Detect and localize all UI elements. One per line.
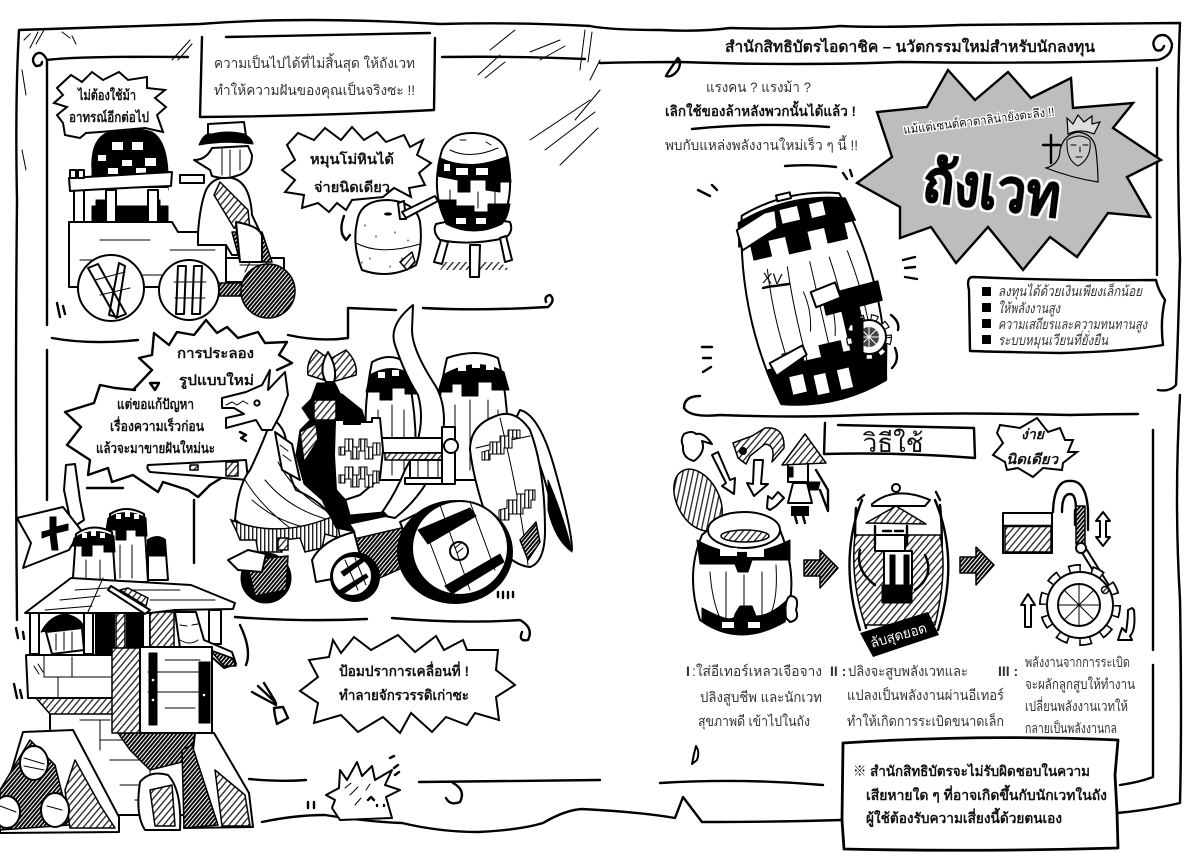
rear barrels bbox=[365, 353, 509, 480]
step I text: ปลิงสูบชีพ และนักเวท bbox=[700, 689, 822, 706]
step II text: II : bbox=[830, 663, 846, 679]
illustration: rider on barrel cart bbox=[57, 122, 295, 321]
feature list box: ให้พลังงานสูง bbox=[998, 300, 1061, 317]
millstone bbox=[341, 196, 438, 274]
step III text: กลายเป็นพลังงานกล bbox=[1025, 719, 1117, 736]
stool bbox=[434, 219, 512, 277]
title banner: สำนักสิทธิบัตรไอดาชิค – นวัตกรรมใหม่สำหรับนักลงทุน bbox=[725, 37, 1095, 57]
step II text: ปลิงจะสูบพลังเวทและ bbox=[848, 663, 968, 680]
track right bbox=[138, 733, 253, 830]
step III text: เปลี่ยนพลังงานเวทให้ bbox=[1025, 697, 1128, 714]
track left bbox=[0, 730, 119, 833]
curved horn tail bbox=[380, 305, 444, 518]
rider bbox=[180, 122, 272, 262]
caption: endless possibilities bbox=[200, 33, 435, 117]
illustration: millstone and barrel on stool bbox=[341, 133, 512, 277]
icon: leech bbox=[733, 428, 784, 464]
speech bubble: no horses needed: อาทรณ์อีกต่อไป bbox=[69, 108, 149, 125]
speech bubble: easy and cheap: นิดเดียว bbox=[1006, 451, 1059, 467]
label: top secret: ลับสุดยอด bbox=[868, 620, 929, 652]
arrows into barrel bbox=[712, 452, 784, 510]
step III text: พลังงานจากการระเบิด bbox=[1025, 654, 1130, 670]
speech bubble: millstone: จ่ายนิดเดียว bbox=[314, 179, 390, 195]
cart wheels bbox=[57, 255, 295, 321]
step I text: :ใส่อีเทอร์เหลวเจือจาง bbox=[692, 663, 822, 679]
heading: how to use: วิธีใช้ bbox=[862, 428, 923, 458]
illustration: dragon knight war machine bbox=[147, 305, 572, 604]
illustration: moving fortress tower bbox=[0, 464, 288, 833]
soldier with beard bbox=[175, 612, 236, 668]
speech bubble: new kind of contest: การประลอง bbox=[177, 345, 254, 361]
knight shield bbox=[334, 418, 383, 500]
speech bubble: no horses needed: ไม่ต้องใช้ม้า bbox=[76, 86, 136, 103]
speech bubble: moving fortress: ป้อมปราการเคลื่อนที่ ! bbox=[339, 661, 469, 679]
illustration: tilted magic barrel: XV bbox=[762, 270, 783, 288]
gray star burst: product name: แม้แต่เซนต์คาตาลิน่ายังตะลึง !! bbox=[903, 105, 1055, 137]
soldier with dark helmet bbox=[41, 614, 84, 654]
small wheel bbox=[330, 552, 380, 602]
feature list box: ระบบหมุนเวียนที่ยั่งยืน bbox=[998, 330, 1108, 349]
speech bubble: new kind of contest bbox=[133, 320, 292, 440]
disclaimer box: เสียหายใด ๆ ที่อาจเกิดขึ้นกับนักเวทในถัง bbox=[866, 784, 1107, 803]
intro text block: เลิกใช้ของล้าหลังพวกนั้นได้แล้ว ! bbox=[665, 100, 856, 119]
step I text bbox=[686, 663, 822, 730]
flag bbox=[17, 464, 84, 568]
arrow: step one to two bbox=[804, 550, 838, 588]
step III text bbox=[998, 654, 1135, 736]
wood panel with straps bbox=[112, 647, 212, 733]
gray star burst: product name: ถังเวท bbox=[919, 148, 1064, 230]
step I text: I bbox=[686, 663, 690, 679]
speech bubble: millstone bbox=[282, 127, 431, 212]
crossbar bbox=[380, 427, 458, 484]
speech bubble: easy and cheap bbox=[993, 418, 1077, 477]
step II text: แปลงเป็นพลังงานผ่านอีเทอร์ bbox=[847, 686, 1004, 703]
speech bubble: moving fortress bbox=[300, 635, 515, 733]
tower posts and windows bbox=[28, 610, 221, 657]
step III text: III : bbox=[998, 663, 1018, 679]
speech bubble: no horses needed bbox=[54, 72, 166, 138]
intro text block: แรงคน ? แรงม้า ? bbox=[706, 79, 811, 95]
step III text: จะผลักลูกสูบให้ทำงาน bbox=[1025, 676, 1135, 693]
feature list box: ลงทุนได้ด้วยเงินเพียงเล็กน้อย bbox=[998, 283, 1143, 300]
gear bbox=[1044, 569, 1116, 641]
barrel on cart bbox=[69, 128, 172, 222]
pipe bbox=[1053, 481, 1088, 530]
large shield bbox=[470, 410, 572, 567]
gray star burst: product name bbox=[857, 70, 1161, 270]
caption: endless possibilities: ทำให้ความฝันของคุณเป็นจริงซะ !! bbox=[214, 81, 415, 99]
disclaimer box: ※ สำนักสิทธิบัตรจะไม่รับผิดชอบในความ bbox=[853, 762, 1090, 779]
intro text block bbox=[665, 79, 858, 167]
motion marks bbox=[698, 170, 917, 372]
speech bubble: fix speed first bbox=[65, 385, 223, 497]
arrow: step two to three bbox=[960, 547, 994, 585]
speech bubble: easy and cheap: ง่าย bbox=[1021, 426, 1046, 442]
stool barrel bbox=[437, 133, 511, 231]
knight bbox=[296, 350, 388, 532]
step I text: สุขภาพดี เข้าไปในถัง bbox=[698, 713, 810, 730]
icon: hedgehog creature bbox=[308, 756, 400, 820]
dragon head bbox=[222, 370, 288, 441]
speech bubble: millstone: หมุนโม่หินได้ bbox=[310, 150, 394, 168]
feature list box: ความเสถียรและความทนทานสูง bbox=[998, 316, 1148, 333]
stone column bbox=[36, 698, 205, 815]
motion marks bbox=[14, 625, 288, 724]
queen portrait bbox=[1043, 115, 1100, 182]
icon: jug bbox=[682, 432, 712, 461]
tower barrels bbox=[72, 509, 168, 592]
wizard child bbox=[782, 434, 828, 523]
feature list box bbox=[968, 277, 1165, 353]
motion arrows bbox=[1096, 512, 1110, 546]
gear bbox=[850, 315, 898, 368]
illustration: tilted magic barrel bbox=[698, 170, 917, 415]
label: top secret bbox=[860, 612, 939, 657]
speech bubble: fix speed first: เรื่องความเร็วก่อน bbox=[110, 416, 204, 434]
icon: feather bbox=[692, 746, 698, 764]
piston rod bbox=[1076, 506, 1110, 592]
big wheel bbox=[397, 500, 513, 604]
cart body bbox=[69, 222, 285, 296]
speech bubble: fix speed first: แล้วจะมาขายฝันใหม่นะ bbox=[96, 439, 215, 456]
roof bbox=[25, 578, 235, 614]
speech bubble: fix speed first: แต่ขอแก้ปัญหา bbox=[117, 396, 194, 413]
step III illustration: piston and gear bbox=[1003, 481, 1134, 641]
main barrel bbox=[693, 512, 797, 635]
legs and armor plates bbox=[228, 510, 428, 603]
intro text block: พบกับแหล่งพลังงานใหม่เร็ว ๆ นี้ !! bbox=[665, 135, 858, 153]
speech bubble: moving fortress: ทำลายจักรวรรดิเก่าซะ bbox=[339, 687, 469, 703]
speech bubble: new kind of contest: รูปแบบใหม่ bbox=[179, 371, 254, 389]
tank bbox=[1003, 513, 1052, 553]
disclaimer box: ผู้ใช้ต้องรับความเสี่ยงนี้ด้วยตนเอง bbox=[866, 807, 1062, 827]
caption: endless possibilities: ความเป็นไปได้ที่ไม่สิ้นสุด ให้ถังเวท bbox=[214, 53, 415, 72]
step II illustration: capsule with mage bbox=[849, 484, 948, 630]
step II text bbox=[830, 663, 1004, 729]
heading: how to use bbox=[824, 423, 975, 458]
cannon tube bbox=[147, 460, 248, 480]
step II text: ทำให้เกิดการระเบิดขนาดเล็ก bbox=[847, 712, 1004, 729]
disclaimer box bbox=[842, 738, 1118, 850]
stone block bbox=[26, 655, 120, 698]
dragon body bbox=[231, 418, 340, 552]
barrel lid bbox=[664, 461, 732, 539]
step I illustration: ingredients in barrel bbox=[664, 428, 828, 635]
